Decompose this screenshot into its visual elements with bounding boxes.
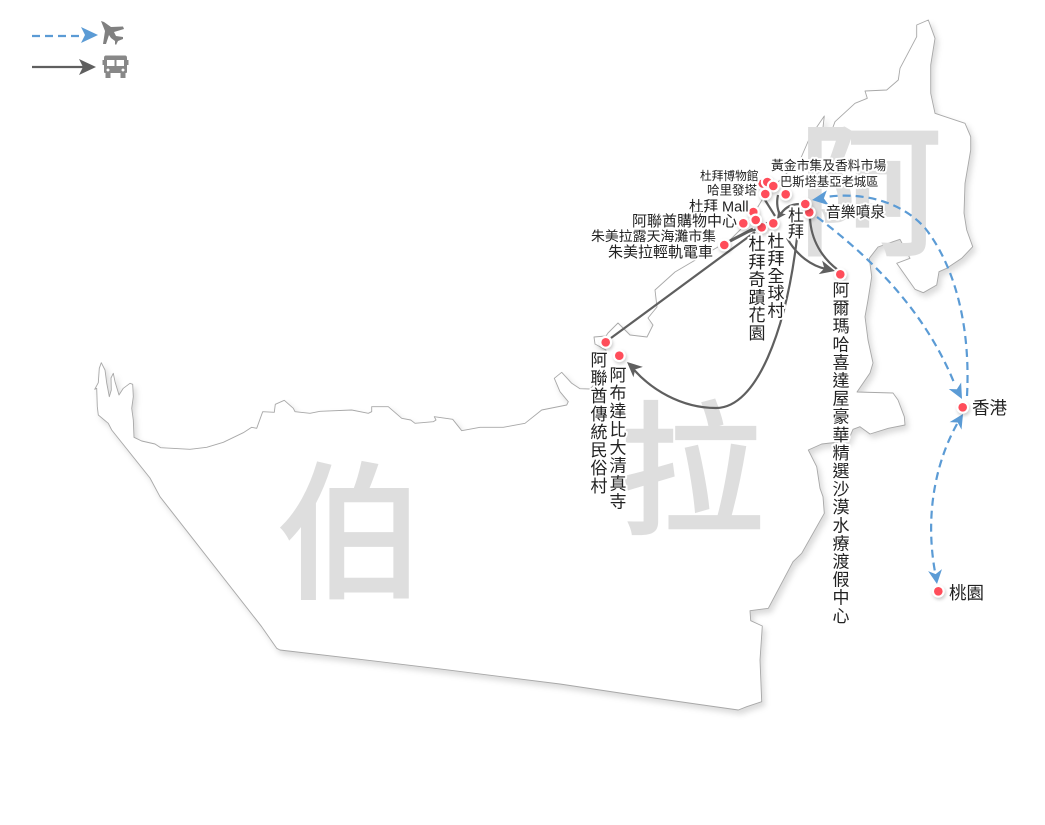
location labels: horizontal: 巴斯塔基亞老城區: [780, 175, 878, 189]
location markers: [599, 176, 969, 598]
location labels: vertical: 阿布達比大清真寺: [606, 366, 626, 511]
watermark: country name: 阿: [798, 115, 942, 274]
location labels: horizontal: 桃園: [949, 583, 984, 603]
legend: flight and bus: [32, 21, 128, 78]
location labels: horizontal: 音樂噴泉: [826, 204, 885, 221]
location labels: horizontal: [591, 158, 1007, 603]
location labels: vertical: 阿聯酋傳統民俗村: [588, 351, 607, 495]
location labels: horizontal: 香港: [972, 398, 1007, 418]
location labels: vertical: 杜拜奇蹟花園: [746, 235, 765, 342]
watermark: country name: 伯: [278, 454, 424, 617]
location labels: horizontal: 杜拜博物館: [700, 169, 759, 183]
location labels: vertical: 杜拜: [785, 207, 804, 239]
location labels: vertical: [588, 207, 849, 625]
location labels: horizontal: 黃金市集及香料市場: [771, 158, 886, 173]
map: country outline: [95, 20, 973, 710]
location labels: vertical: 杜拜全球村: [764, 232, 784, 319]
location labels: horizontal: 朱美拉輕軌電車: [608, 244, 713, 261]
location labels: vertical: 阿爾瑪哈喜達屋豪華精選沙漠水療渡假中心: [830, 281, 849, 625]
location labels: horizontal: 朱美拉露天海灘市集: [591, 228, 716, 244]
bus routes: [611, 195, 838, 408]
location labels: horizontal: 哈里發塔: [707, 182, 758, 198]
location labels: horizontal: 杜拜 Mall: [689, 198, 749, 216]
location labels: horizontal: 阿聯酋購物中心: [632, 212, 737, 230]
watermark: country name: 拉: [620, 394, 763, 553]
flight routes: [811, 190, 969, 585]
watermark: country name: [278, 115, 942, 617]
